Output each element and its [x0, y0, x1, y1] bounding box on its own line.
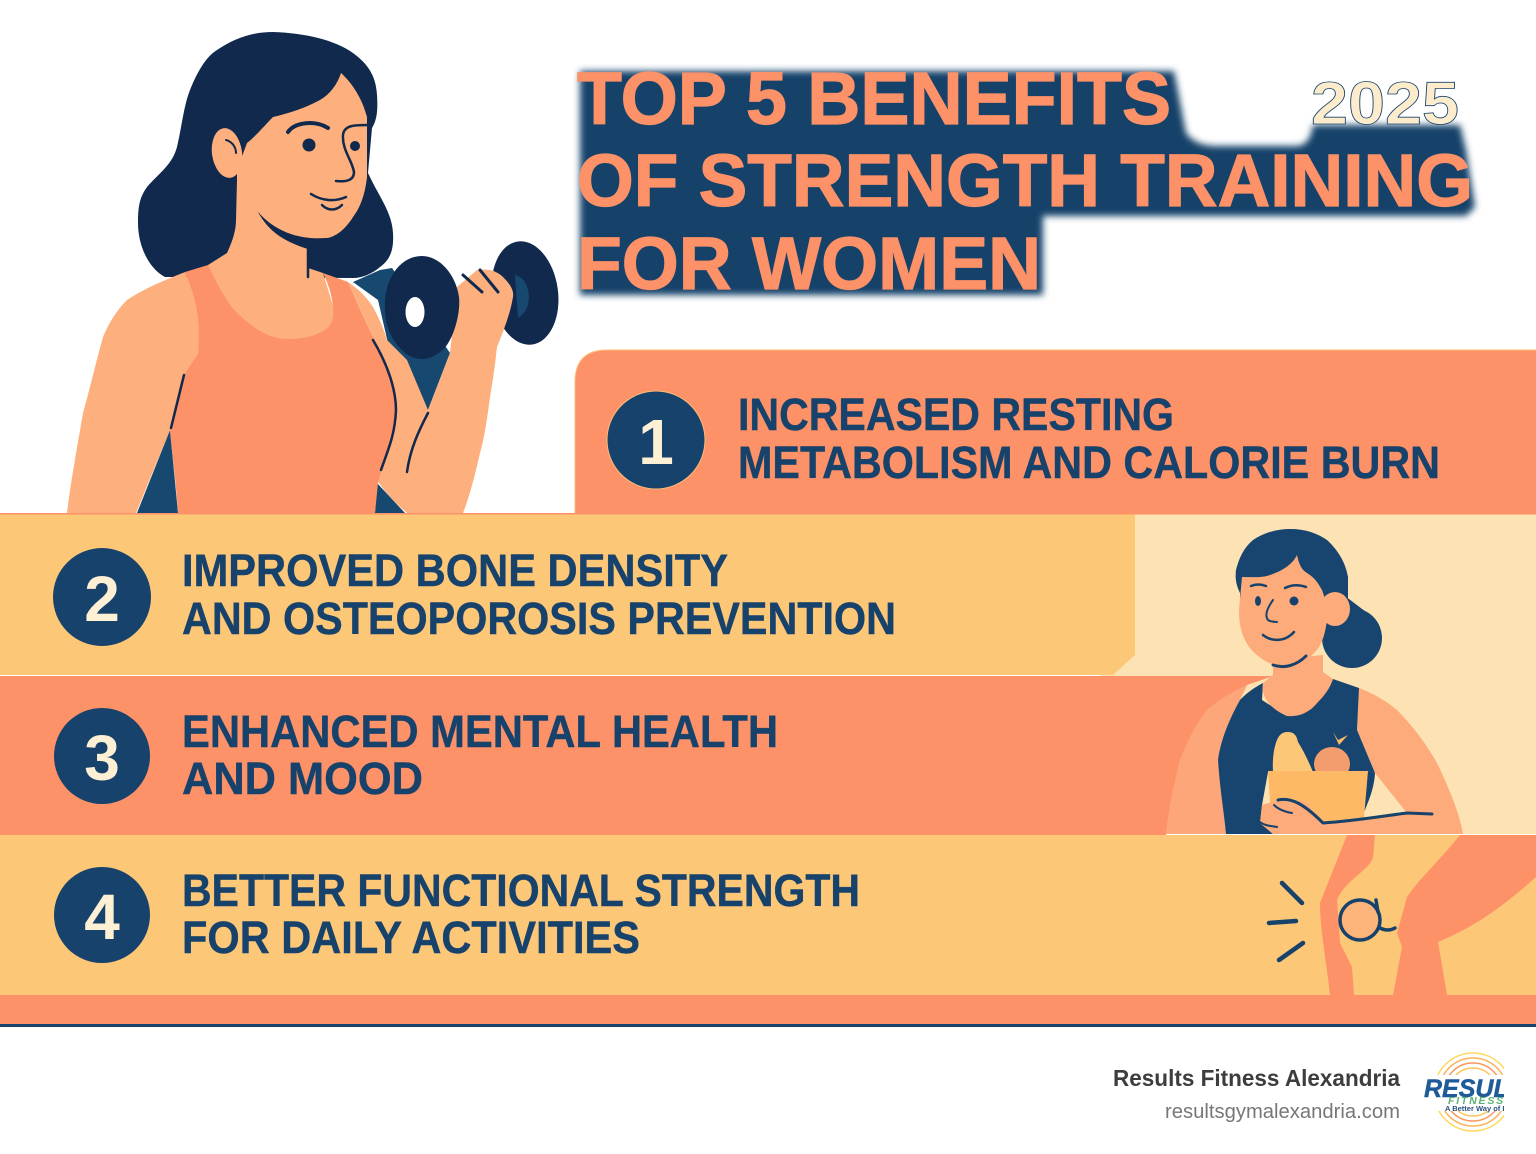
back leg: [1320, 835, 1375, 995]
neck: [1263, 655, 1333, 716]
blue shapes behind body: [137, 268, 450, 513]
knee ring: [1340, 900, 1395, 940]
benefit 4 text: BETTER FUNCTIONAL STRENGTH: [182, 865, 860, 916]
raised arm and hand: [348, 269, 513, 513]
ear: [209, 126, 245, 180]
panel: benefit 2 band: [0, 513, 1536, 675]
hand: [1260, 798, 1340, 834]
panel: benefit 1 band: [575, 350, 1536, 513]
right arm and lower body: [1260, 688, 1463, 834]
near dumbbell plate: [385, 256, 459, 359]
benefit 1 number badge: 1: [638, 406, 674, 478]
illustration: woman with groceries: [1166, 529, 1463, 834]
left arm: [67, 272, 199, 513]
benefit 3 text: [182, 706, 778, 804]
panel: benefit 4 band: [0, 835, 1536, 995]
year label: 2025: [1311, 70, 1459, 137]
title backing shape: [580, 71, 1475, 295]
jaw shadow: [258, 212, 327, 249]
benefit 4 text: FOR DAILY ACTIVITIES: [182, 912, 640, 963]
benefit 1 number badge: [607, 391, 705, 489]
benefit 4 text: [182, 865, 860, 963]
benefit 2 number badge: [53, 548, 151, 646]
title: FOR WOMEN: [577, 222, 1041, 305]
benefit 2 text: IMPROVED BONE DENSITY: [182, 545, 728, 596]
left arm: [1166, 685, 1247, 834]
logo: [1424, 1052, 1504, 1132]
benefit 1 text: METABOLISM AND CALORIE BURN: [738, 437, 1440, 488]
benefit 3 text: ENHANCED MENTAL HEALTH: [182, 706, 778, 757]
face details: [226, 123, 368, 210]
panel: benefit 3 band: [0, 676, 1273, 835]
logo: RESUL: [1424, 1075, 1509, 1103]
far dumbbell plate: [485, 237, 565, 349]
logo: A Better Way of Life: [1445, 1104, 1516, 1113]
front leg: [1393, 835, 1536, 995]
pain rays: [1269, 883, 1303, 960]
face: [237, 73, 367, 238]
footer text: resultsgymalexandria.com: [1165, 1101, 1400, 1123]
body lines: [171, 248, 498, 472]
benefit 3 number badge: 3: [84, 722, 120, 794]
benefit 4 number badge: 4: [84, 881, 120, 953]
bun: [1322, 596, 1382, 668]
panel: light background behind second figure: [1100, 514, 1536, 834]
illustration: woman with dumbbell: [67, 32, 565, 513]
grocery contents: [1273, 732, 1350, 781]
hair: [138, 32, 393, 278]
benefit 2 text: AND OSTEOPOROSIS PREVENTION: [182, 593, 896, 644]
benefit 4 number badge: [54, 867, 150, 963]
title: [577, 57, 1473, 305]
logo: FITNESS: [1448, 1095, 1505, 1107]
benefit 3 number badge: [54, 708, 150, 804]
benefit 2 number badge: 2: [84, 563, 120, 635]
footer text: [1113, 1065, 1400, 1123]
benefit 3 text: AND MOOD: [182, 753, 423, 804]
benefit 1 text: INCREASED RESTING: [738, 389, 1174, 440]
tank top: [170, 265, 396, 513]
title: OF STRENGTH TRAINING: [577, 139, 1473, 222]
benefit 1 text: [738, 389, 1440, 488]
grocery bag: [1268, 771, 1368, 823]
neck and chest: [200, 180, 345, 345]
bottom orange strip with navy rule: [0, 995, 1536, 1027]
figure details: [1251, 584, 1432, 827]
benefit 2 text: [182, 545, 896, 644]
ear: [1320, 592, 1350, 626]
face: [1239, 555, 1327, 665]
illustration: knee joint: [1269, 835, 1536, 995]
footer text: Results Fitness Alexandria: [1113, 1065, 1400, 1091]
hair: [1236, 529, 1348, 610]
title: TOP 5 BENEFITS: [577, 57, 1171, 140]
navy top: [1218, 679, 1375, 834]
